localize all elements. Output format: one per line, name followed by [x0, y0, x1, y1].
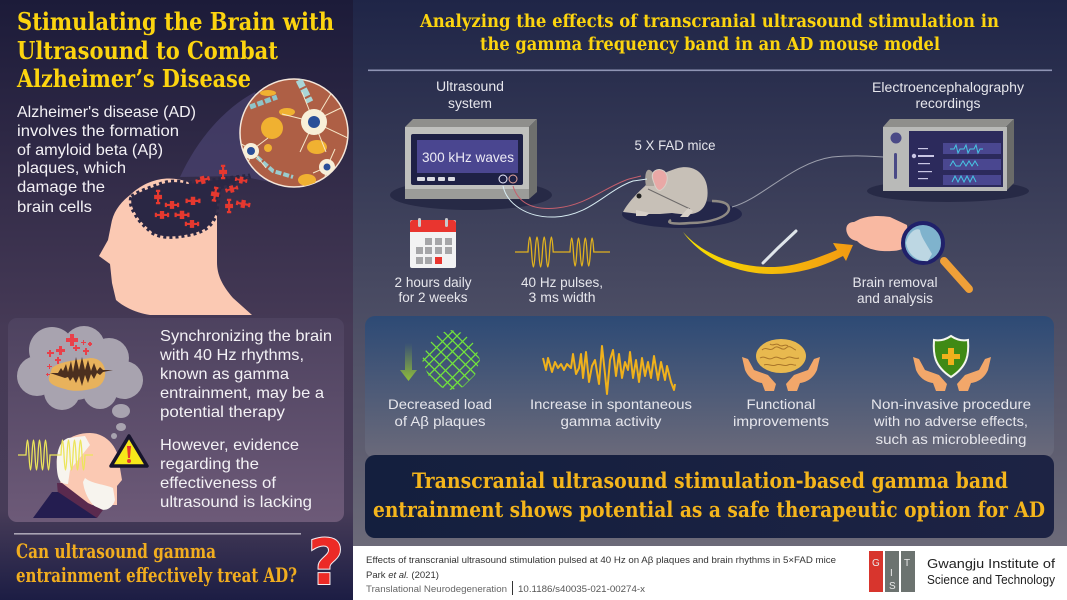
- panel: conclusion: [365, 455, 1054, 538]
- intro text: involves the formation: [17, 123, 179, 140]
- gamma entrainment text: potential therapy: [160, 404, 285, 421]
- label: non-invasive: [871, 397, 1031, 447]
- label: duration: 2 hours daily: [394, 275, 472, 290]
- label: decreased load: Decreased load: [388, 397, 492, 412]
- red plaque puzzle pieces: [154, 165, 251, 228]
- label: EEG: [872, 80, 1024, 111]
- question heading: entrainment effectively treat AD?: [16, 564, 297, 587]
- label: non-invasive: such as microbleeding: [876, 432, 1026, 447]
- question heading: [16, 540, 297, 587]
- icon: scalpel: [763, 231, 796, 263]
- label: gamma activity: Increase in spontaneous: [530, 397, 692, 412]
- citation: Translational Neurodegeneration: [366, 584, 507, 595]
- gamma entrainment text: entrainment, may be a: [160, 385, 324, 402]
- intro text: of amyloid beta (Aβ): [17, 142, 163, 159]
- icon: ultrasound device: [390, 119, 552, 210]
- evidence text: ultrasound is lacking: [160, 494, 312, 511]
- label: ultrasound system: [436, 79, 504, 111]
- logo: GIST: [869, 551, 915, 592]
- icon: ultrasound device: 300 kHz waves: [422, 149, 514, 165]
- icon: EEG device: [867, 119, 1029, 202]
- icon: brain with magnifier: [846, 216, 969, 289]
- label: brain removal: and analysis: [857, 291, 933, 306]
- label: non-invasive: with no adverse effects,: [873, 414, 1028, 429]
- label: EEG: Electroencephalography: [872, 80, 1024, 95]
- citation: 10.1186/s40035-021-00274-x: [518, 584, 645, 595]
- gamma entrainment text: Synchronizing the brain: [160, 328, 332, 345]
- label: gamma activity: gamma activity: [560, 414, 662, 429]
- panel: gamma entrainment box: [8, 318, 344, 522]
- icon: red question mark: ?: [308, 526, 344, 599]
- label: functional: improvements: [733, 414, 829, 429]
- icon: warning triangle: [111, 436, 147, 466]
- label: ultrasound system: system: [448, 96, 492, 111]
- evidence text: effectiveness of: [160, 475, 277, 492]
- institution name: Science and Technology: [927, 573, 1056, 587]
- label: pulses: [521, 275, 603, 305]
- question heading: Can ultrasound gamma: [16, 540, 216, 563]
- panel: outcomes: [365, 316, 1054, 458]
- intro text: [17, 104, 196, 216]
- evidence text: regarding the: [160, 456, 259, 473]
- label: pulses: 3 ms width: [528, 290, 596, 305]
- beam from head to magnified circle: [180, 92, 300, 188]
- icon: brain in hands: [742, 339, 820, 391]
- intro text: brain cells: [17, 199, 92, 216]
- citation: Park et al. (2021): [366, 570, 439, 581]
- icon: calendar: [410, 218, 456, 268]
- gamma entrainment text: [159, 328, 332, 421]
- icon: down arrow: [400, 343, 417, 381]
- label: pulses: 40 Hz pulses,: [521, 275, 603, 290]
- icon: mouse on shadow: [622, 167, 742, 228]
- logo: GIST: S: [889, 581, 896, 592]
- label: brain removal: Brain removal: [852, 275, 938, 290]
- icon: green plaque mesh: [422, 330, 480, 390]
- title: Stimulating the Brain with: [17, 7, 334, 36]
- label: gamma activity: [530, 397, 692, 429]
- institution name: [927, 557, 1056, 587]
- panel: right background: [353, 0, 1067, 546]
- label: mice: 5 X FAD mice: [634, 138, 716, 153]
- label: ultrasound system: Ultrasound: [436, 79, 504, 94]
- icon: shield in hands: [913, 336, 991, 391]
- label: brain removal: [852, 275, 938, 306]
- arrow: to brain analysis: [683, 232, 853, 274]
- main title: [419, 12, 999, 55]
- icon: head silhouette with brain: [99, 165, 252, 315]
- gamma entrainment text: with 40 Hz rhythms,: [159, 347, 304, 364]
- logo: GIST: T: [904, 558, 910, 569]
- label: functional: [733, 397, 829, 429]
- icon: gamma activity trace: [543, 346, 675, 394]
- title: [16, 7, 334, 93]
- label: duration: for 2 weeks: [398, 290, 468, 305]
- label: decreased load: of Aβ plaques: [394, 414, 486, 429]
- citation: [366, 555, 836, 595]
- intro text: Alzheimer's disease (AD): [17, 104, 196, 121]
- citation: Effects of transcranial ultrasound stimulation pulsed at 40 Hz on Aβ plaques and brain rhythms in 5×FAD mice: [366, 555, 836, 566]
- icon: thought cloud with brain and plaques: [17, 326, 143, 439]
- evidence text: However, evidence: [160, 437, 299, 454]
- main title: the gamma frequency band in an AD mouse model: [480, 35, 940, 55]
- logo: GIST: I: [890, 568, 893, 579]
- icon: elderly man with waves: [18, 433, 122, 518]
- institution name: Gwangju Institute of: [927, 557, 1056, 571]
- title: Ultrasound to Combat: [17, 36, 278, 65]
- main title: Analyzing the effects of transcranial ultrasound stimulation in: [419, 12, 999, 32]
- label: duration: [394, 275, 472, 305]
- panel: left background: [0, 0, 353, 600]
- label: decreased load: [388, 397, 492, 429]
- wires: [503, 156, 883, 217]
- label: EEG: recordings: [916, 96, 981, 111]
- icon: 40 Hz pulse wave: [515, 237, 610, 267]
- intro text: plaques, which: [17, 160, 126, 177]
- label: functional: Functional: [746, 397, 816, 412]
- title: Alzheimer’s Disease: [16, 64, 251, 93]
- logo: GIST: G: [872, 558, 880, 569]
- intro text: damage the: [17, 179, 105, 196]
- evidence text: [160, 437, 312, 511]
- gamma entrainment text: known as gamma: [160, 366, 289, 383]
- panel: conclusion: Transcranial ultrasound stimulation-based gamma band: [412, 468, 1008, 493]
- panel: footer: [353, 546, 1067, 600]
- label: non-invasive: Non-invasive procedure: [871, 397, 1031, 412]
- icon: magnified brain tissue circle: [238, 79, 348, 187]
